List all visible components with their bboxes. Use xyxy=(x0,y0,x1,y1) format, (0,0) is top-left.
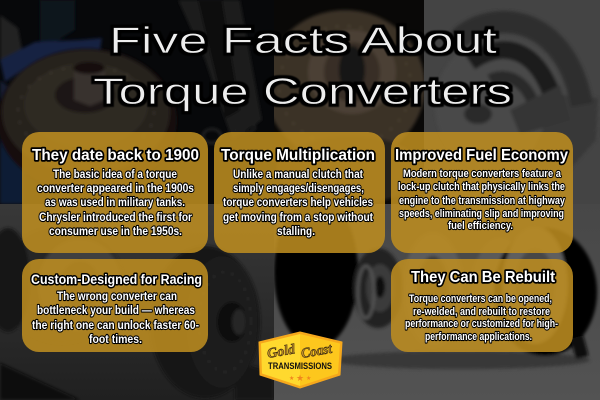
logo script: Gold Coast: Gold xyxy=(266,342,297,362)
text block: custom-designed for racing: The wrong converter can xyxy=(57,289,177,303)
text block: 1900 history xyxy=(37,167,194,238)
text block: 1900 history: as was used in military tanks. xyxy=(45,195,185,209)
text block: 1900 history: The basic idea of a torque xyxy=(53,167,177,181)
text block: improved fuel economy xyxy=(398,168,566,232)
panel: torque multiplication xyxy=(214,132,385,253)
title xyxy=(93,20,512,112)
heading: custom-designed for racing: Custom-Designed for Racing xyxy=(31,272,202,287)
text block: improved fuel economy: Modern torque converters feature a xyxy=(403,168,562,180)
heading: they can be rebuilt: They Can Be Rebuilt xyxy=(411,269,555,286)
text block: they can be rebuilt: Torque converters can be opened, xyxy=(409,293,552,305)
text block: 1900 history: Chrysler introduced the first for xyxy=(39,210,192,224)
text block: they can be rebuilt xyxy=(405,293,558,343)
text block: custom-designed for racing: the right one can unlock faster 60- xyxy=(32,318,199,332)
logo script: Gold Coast: Coast xyxy=(300,342,334,362)
text block: custom-designed for racing: bottleneck your build — whereas xyxy=(37,303,195,317)
logo script: Gold Coast xyxy=(266,342,334,362)
text block: torque multiplication: simply engages/disengages, xyxy=(233,181,364,195)
heading: torque multiplication: Torque Multiplication xyxy=(221,147,375,164)
panel: they can be rebuilt xyxy=(391,259,573,352)
panel: improved fuel economy xyxy=(391,132,573,253)
text block: 1900 history: consumer use in the 1950s. xyxy=(49,224,182,238)
text block: torque multiplication xyxy=(223,167,373,238)
heading: improved fuel economy: Improved Fuel Economy xyxy=(395,147,568,164)
text block: 1900 history: converter appeared in the 1900s xyxy=(37,181,194,195)
logo stars: ★ xyxy=(296,374,304,384)
text block: they can be rebuilt: re-welded, and rebuilt to restore xyxy=(413,306,550,318)
logo stars: ★ xyxy=(306,375,311,382)
panel: custom-designed for racing xyxy=(22,259,208,352)
text block: torque multiplication: get moving from a stop without xyxy=(223,210,373,224)
text block: improved fuel economy: lock-up clutch that physically links the xyxy=(398,181,565,193)
title: Torque Converters xyxy=(93,71,512,112)
text block: torque multiplication: torque converters help vehicles xyxy=(223,195,373,209)
logo: Gold Coast Transmissions badge xyxy=(259,332,342,388)
text block: improved fuel economy: fuel efficiency. xyxy=(448,220,513,232)
heading: they date back to 1900: They date back to 1900 xyxy=(32,147,199,164)
text block: custom-designed for racing: foot times. xyxy=(89,332,142,346)
text block: improved fuel economy: engine to the transmission at highway xyxy=(399,195,566,207)
text block: they can be rebuilt: performance applications. xyxy=(425,331,532,343)
text block: custom-designed for racing xyxy=(32,289,199,346)
panel: they date back to 1900 xyxy=(22,132,208,253)
text block: torque multiplication: stalling. xyxy=(277,224,315,238)
text block: torque multiplication: Unlike a manual clutch that xyxy=(233,167,363,181)
text block: they can be rebuilt: performance or customized for high- xyxy=(405,318,558,330)
logo stars: ★ xyxy=(289,375,294,382)
logo wordmark: Transmissions: TRANSMISSIONS xyxy=(268,361,332,371)
logo stars xyxy=(289,374,311,384)
title: Five Facts About xyxy=(109,20,498,61)
